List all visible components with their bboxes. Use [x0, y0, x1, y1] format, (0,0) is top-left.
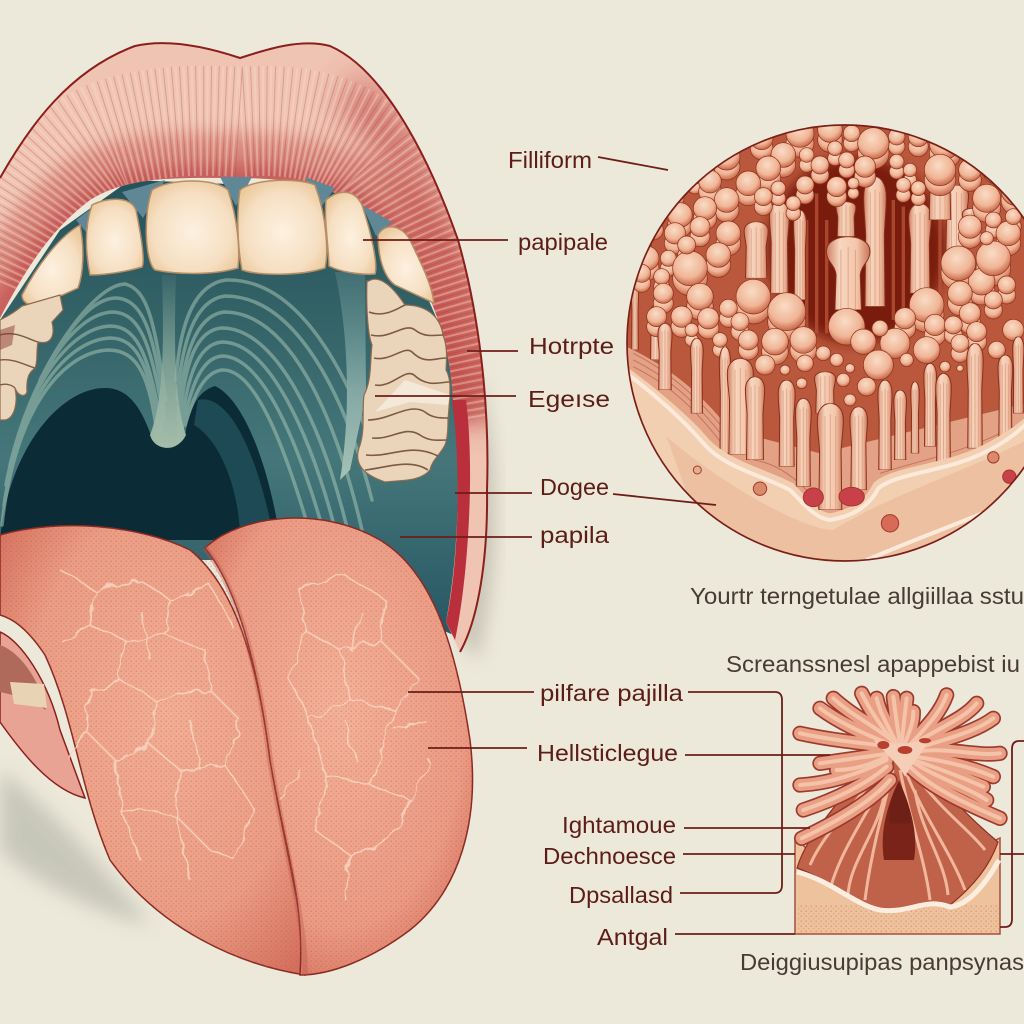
diagram dark cavity [883, 780, 915, 860]
central large papilla [826, 237, 870, 310]
inner lip red strip [446, 400, 470, 640]
surface tissue band [627, 347, 1024, 520]
tooth: left lateral [86, 199, 143, 275]
side fold [335, 272, 366, 480]
tongue cracks [60, 570, 430, 900]
diagram core [873, 738, 930, 777]
dark streaks behind papillae [807, 193, 940, 333]
lower lip and inner cheek [0, 632, 85, 798]
tooth: central left [146, 181, 239, 274]
diagram cavity front [889, 783, 910, 823]
caption: upper: Yourtr terngetulae allgiillaa sstu [690, 583, 1024, 609]
label: Dogee: Dogee [540, 474, 609, 500]
small vessels [693, 452, 1016, 532]
shadow beneath lower lip [0, 770, 150, 925]
right molars [358, 279, 450, 482]
tooth: left canine [22, 225, 83, 306]
tongue stipple [0, 520, 472, 975]
deep tissue layer [630, 369, 1024, 560]
tongue [0, 518, 472, 975]
caption: lower: Deiggiusupipas panpsynas [740, 949, 1024, 975]
tooth: right canine [378, 227, 434, 303]
diagram stalk [797, 760, 998, 909]
label: papila: papila [540, 522, 609, 548]
second throat band [194, 399, 270, 540]
left molars [0, 295, 63, 420]
lower round papillae [755, 308, 1024, 406]
label: Hellsticlegue: Hellsticlegue [537, 740, 678, 766]
palate folds [2, 280, 380, 540]
diagram branching fingers [800, 693, 1000, 838]
upper teeth [22, 180, 434, 306]
caption: diagram heading: Screanssnesl apappebist iu [726, 651, 1020, 677]
label: Egeıse: Egeıse [528, 386, 610, 412]
label: papipale: papipale [518, 229, 608, 255]
label: Dpsallasd: Dpsallasd [569, 882, 673, 908]
label: Filliform: Filliform [508, 147, 592, 173]
label: pilfare pajilla: pilfare pajilla [540, 680, 683, 706]
papillae head shadows elongating stems [633, 128, 1024, 365]
deep tissue stipple [667, 437, 1024, 560]
label: Hotrpte: Hotrpte [529, 333, 614, 359]
diagram tissue stipple [797, 905, 999, 933]
panel: mouth illustration [0, 43, 495, 975]
panel: magnified filiform papillae lens [627, 118, 1024, 587]
uvula [150, 275, 186, 448]
round papillae heads [633, 118, 1024, 355]
tongue: right lobe [205, 518, 472, 975]
label: Antgal: Antgal [597, 924, 668, 950]
tooth: central right [238, 180, 327, 274]
tongue: left lobe [0, 526, 305, 975]
central frontmost papilla [817, 403, 843, 510]
label: Ightamoue: Ightamoue [562, 812, 676, 838]
front papillae [658, 323, 1024, 490]
diagram white membrane [797, 860, 999, 911]
throat opening [0, 386, 280, 540]
panel: fungiform papilla diagram [795, 693, 1000, 934]
soft shadow beside mouth [460, 370, 495, 660]
tongue median groove [205, 548, 305, 975]
diagram red nodes [877, 738, 931, 754]
upper lip [0, 43, 487, 652]
leader lines [363, 157, 1024, 934]
lip shading [0, 178, 458, 420]
label: Dechnoesce: Dechnoesce [543, 843, 676, 869]
diagram base tissue [795, 838, 1000, 934]
tall back papillae [631, 157, 981, 360]
diagram stalk lines [810, 770, 985, 900]
dark central pit [767, 157, 947, 343]
tooth: right lateral [325, 192, 376, 274]
palate [0, 180, 465, 640]
gum triangles [76, 177, 392, 236]
